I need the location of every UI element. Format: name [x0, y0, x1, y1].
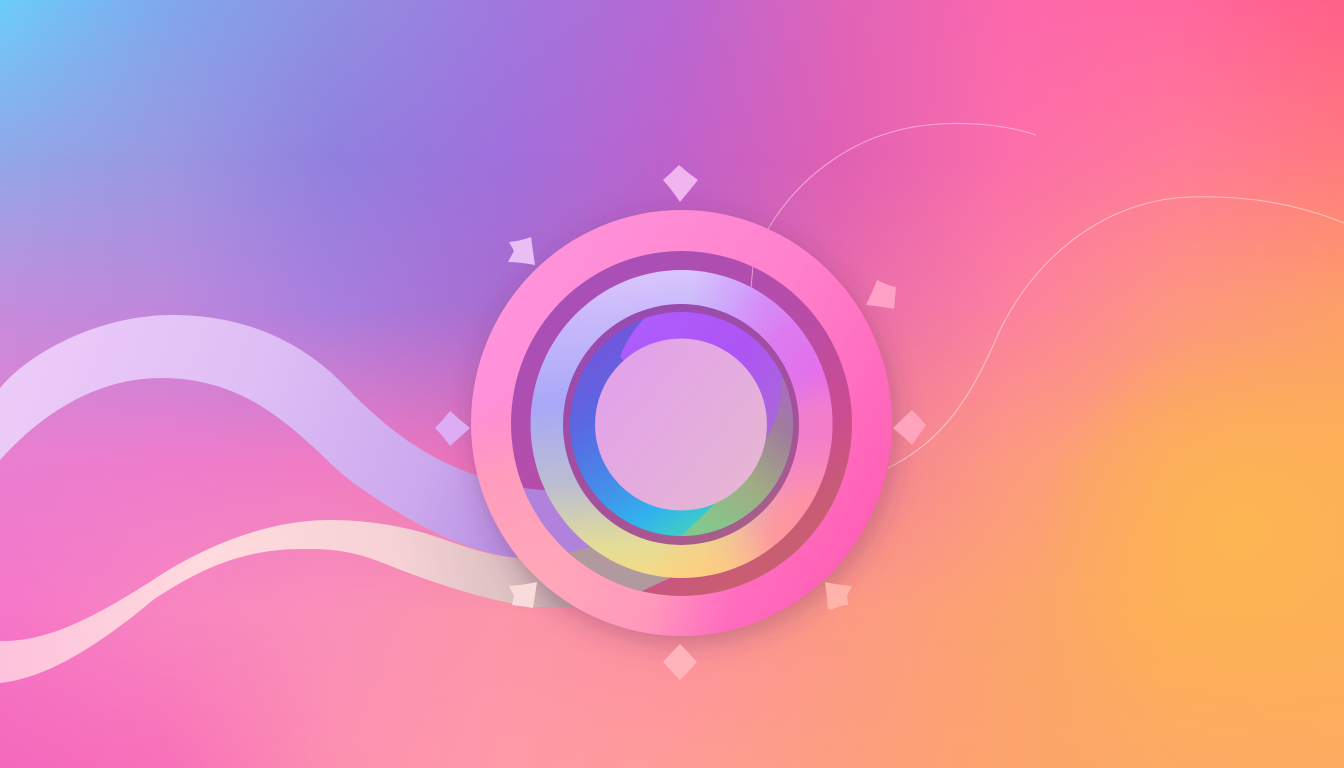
arrow marker: top [663, 165, 698, 202]
arrow marker: upper right [866, 280, 896, 309]
rings group [471, 210, 892, 636]
arrow marker: right [893, 410, 926, 445]
circle: centre disc [595, 338, 767, 510]
ribbon: lilac wave [0, 315, 560, 558]
ring: middle pastel [525, 265, 840, 585]
arrow marker: bottom [663, 644, 697, 680]
ring: outer pink [471, 210, 892, 636]
ring: inner rainbow [570, 312, 793, 536]
thin curved line: right [888, 197, 1344, 468]
arrow marker: lower right [825, 582, 852, 610]
ribbon: pale pink wave [0, 520, 640, 683]
thin curved line: upper [768, 123, 1036, 229]
ring: dark inner gap [563, 304, 799, 545]
arrow marker: lower left [509, 582, 537, 608]
arrow marker: upper left [508, 237, 535, 265]
arrow marker: left [435, 411, 470, 446]
ring: dark magenta gap with ribbons showing through [505, 251, 852, 596]
